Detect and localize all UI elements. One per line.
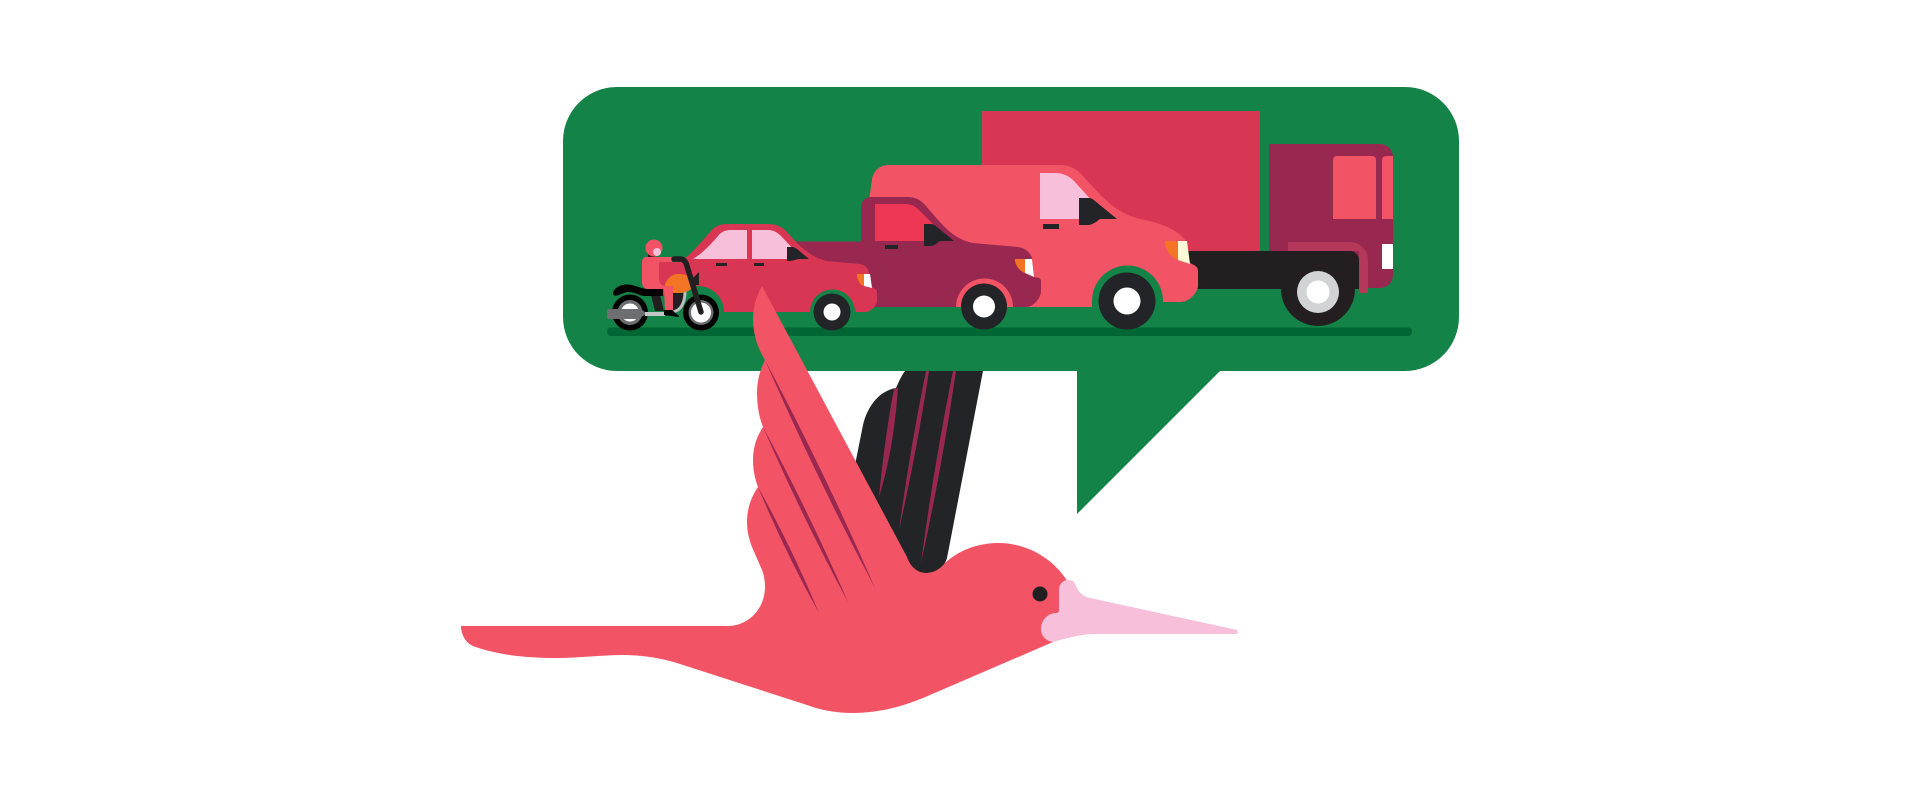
- van window: [1040, 173, 1094, 219]
- car front wheel arch: [810, 290, 855, 312]
- pickup headlight: [1025, 259, 1034, 277]
- truck fender: [1288, 242, 1368, 293]
- motorcycle frame: [651, 295, 664, 311]
- wing stripe 3: [758, 487, 819, 613]
- handlebar: [674, 259, 701, 312]
- rider neck: [648, 253, 655, 257]
- car headlight: [864, 274, 872, 288]
- truck windshield: [1382, 156, 1393, 219]
- truck: [982, 111, 1393, 326]
- van mirror: [1079, 198, 1117, 225]
- back wing stripe 1: [879, 388, 898, 497]
- front wheel hub: [691, 302, 711, 322]
- van body: [869, 165, 1198, 307]
- motorcycle tank: [665, 274, 692, 293]
- car hub: [824, 304, 840, 320]
- van wheel arch: [1092, 266, 1163, 307]
- motorcycle seat: [613, 284, 663, 296]
- pickup body: [780, 197, 1041, 307]
- truck chassis and wheel: [1180, 251, 1359, 326]
- pickup: [780, 197, 1041, 330]
- rider face: [653, 248, 661, 256]
- rear wheel rim: [618, 300, 642, 325]
- car front door handle: [754, 263, 764, 266]
- van: [869, 165, 1198, 330]
- motorcycle rear wheel: [612, 294, 648, 330]
- bird eye: [1032, 586, 1048, 602]
- motorcycle front wheel: [683, 294, 719, 330]
- front wheel rim: [688, 300, 714, 325]
- car rear wheel arch: [672, 286, 724, 312]
- wing stripe 1: [765, 360, 875, 588]
- car rear door handle: [716, 263, 727, 266]
- car body: [659, 224, 877, 312]
- van headlight: [1178, 241, 1190, 264]
- bird body and front wing: [461, 286, 1068, 713]
- back wing stripe 3: [921, 371, 956, 563]
- rear wheel hub: [621, 304, 639, 322]
- car: [659, 224, 877, 330]
- truck cab: [1269, 144, 1393, 288]
- pickup door handle: [885, 245, 898, 249]
- motorcycle lamp: [692, 272, 699, 285]
- wing stripe 2: [763, 427, 848, 602]
- motorcycle engine: [673, 293, 686, 311]
- pickup hub: [973, 296, 995, 318]
- pickup indicator: [1015, 259, 1025, 273]
- van wheel: [1098, 272, 1156, 330]
- rider shoe: [664, 310, 679, 317]
- exhaust bar: [645, 312, 665, 316]
- pickup wheel: [961, 284, 1007, 330]
- motorcycle pipe: [671, 291, 685, 313]
- pickup mirror: [924, 224, 954, 246]
- truck headlight: [1382, 244, 1393, 269]
- truck hub centre: [1306, 280, 1330, 304]
- car window rear: [693, 230, 747, 259]
- car wheel: [814, 294, 850, 330]
- pickup window: [875, 204, 934, 241]
- rider body: [642, 257, 673, 310]
- bird: [461, 286, 1238, 713]
- pickup wheel arch: [956, 278, 1013, 307]
- car mirror: [787, 247, 809, 261]
- van hub: [1114, 288, 1140, 314]
- truck window: [1333, 156, 1376, 219]
- van door handle: [1043, 224, 1059, 229]
- back wing: [855, 371, 983, 573]
- motorcycle and rider: [607, 240, 719, 330]
- truck cargo box: [982, 111, 1260, 256]
- bird beak: [1041, 580, 1238, 642]
- back wing stripe 2: [899, 371, 929, 530]
- speech bubble: [563, 87, 1459, 514]
- car indicator: [857, 274, 864, 286]
- rider helmet: [646, 240, 662, 256]
- van indicator: [1165, 241, 1178, 260]
- road: [607, 328, 1412, 336]
- exhaust: [607, 309, 645, 319]
- car window front: [752, 230, 797, 259]
- truck hub: [1297, 271, 1339, 313]
